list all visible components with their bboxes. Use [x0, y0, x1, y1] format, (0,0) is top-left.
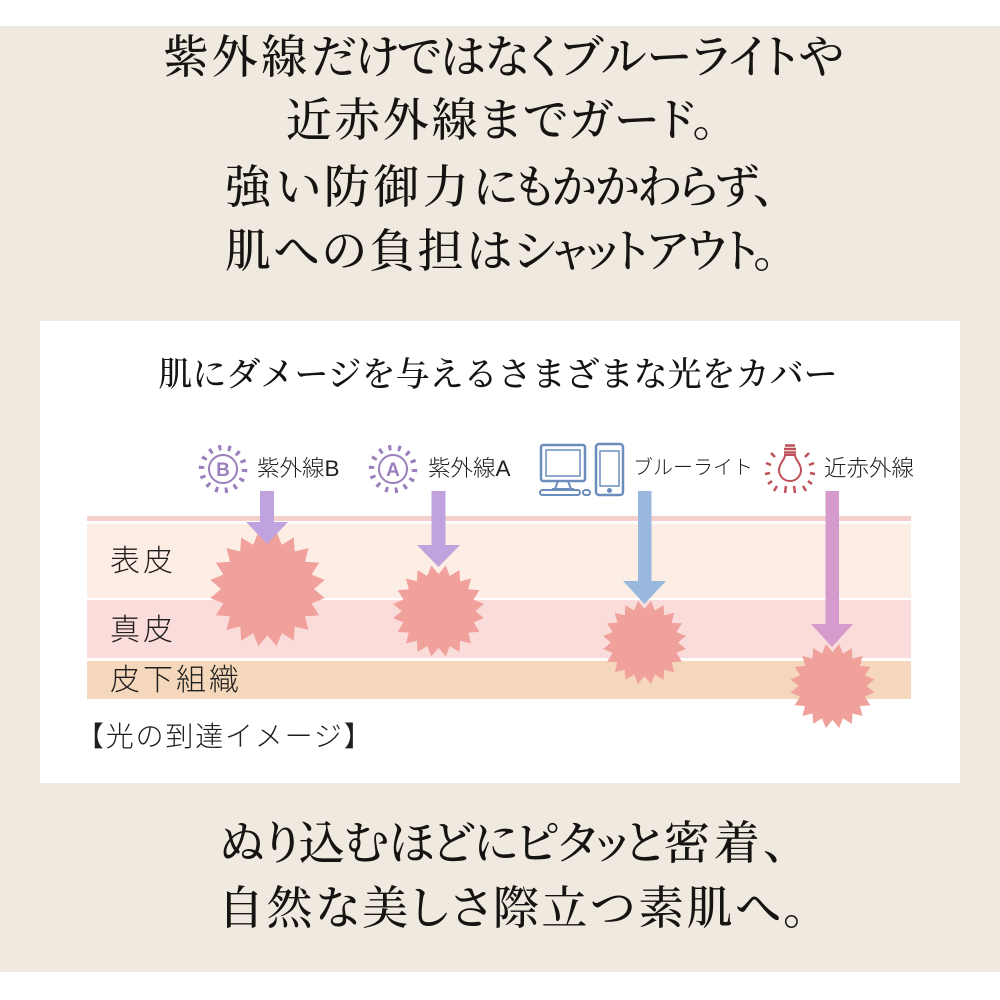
caption: light reach image: 【光の到達イメージ】	[76, 721, 373, 752]
label: epidermis: 表皮	[110, 545, 176, 578]
arrow: near infrared	[811, 491, 853, 647]
skin surface line	[87, 516, 911, 521]
arrow: UVA	[417, 491, 460, 567]
heading: main title: 紫外線だけではなくブルーライトや	[163, 32, 844, 83]
label: blue light: ブルーライト	[633, 457, 753, 479]
label: dermis: 真皮	[110, 614, 176, 647]
icon: UVB sun: B	[216, 460, 230, 481]
layer: epidermis	[87, 524, 911, 598]
icon: UVB sun	[202, 448, 244, 490]
icon: UVA sun	[372, 448, 414, 490]
label: UVA: 紫外線A	[428, 456, 511, 481]
starburst: blue light	[603, 601, 686, 684]
label: near infrared: 近赤外線	[824, 456, 914, 481]
panel: light coverage diagram	[40, 321, 960, 783]
arrow: UVB	[246, 491, 288, 544]
icon: UVA sun: A	[386, 460, 400, 481]
panel heading: 肌にダメージを与えるさまざまな光をカバー	[158, 357, 838, 394]
starburst: UVB	[210, 532, 325, 646]
heading: main title	[163, 32, 844, 277]
starburst: near infrared	[791, 644, 874, 728]
icon: light bulb	[765, 446, 815, 493]
heading: closing message: 自然な美しさ際立つ素肌へ。	[218, 883, 809, 934]
heading: main title: 強い防御力にもかかわらず、	[225, 162, 775, 213]
layer: subcutaneous tissue	[87, 661, 911, 699]
label: UVB: 紫外線B	[257, 456, 340, 481]
arrow: blue light	[623, 491, 666, 604]
heading: main title: 肌への負担はシャットアウト。	[225, 226, 777, 277]
heading: closing message: ぬり込むほどにピタッと密着、	[219, 818, 791, 869]
icon: computer and smartphone	[540, 444, 623, 495]
heading: closing message	[218, 818, 809, 934]
label: subcutaneous tissue: 皮下組織	[110, 664, 242, 697]
layer: dermis	[87, 600, 911, 658]
heading: main title: 近赤外線までガード。	[286, 95, 718, 146]
starburst: UVA	[393, 566, 484, 656]
